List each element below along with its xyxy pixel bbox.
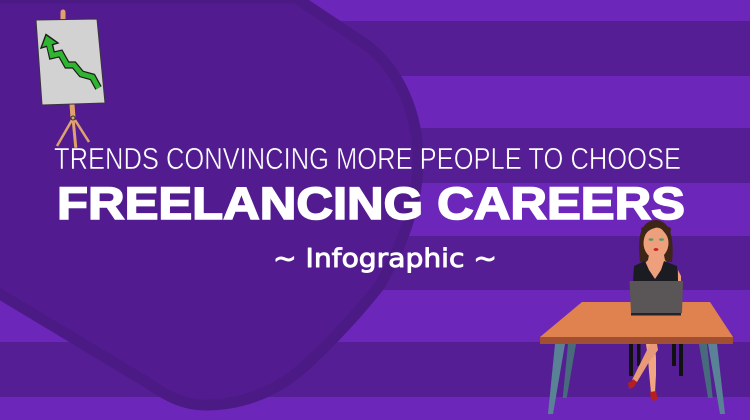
red shoes — [628, 379, 658, 401]
chart board — [36, 19, 105, 105]
subtitle: ~ Infographic ~ — [273, 244, 497, 274]
desk front edge — [540, 337, 733, 344]
crossed legs — [632, 344, 658, 393]
background blob panel — [0, 0, 418, 405]
hair — [639, 220, 673, 262]
icon: easel with growth chart — [36, 12, 105, 150]
easel stand — [57, 12, 89, 150]
arm — [678, 270, 681, 282]
face — [644, 228, 668, 258]
growth arrow — [41, 34, 98, 88]
desk back legs — [563, 344, 713, 398]
illustration: woman at desk — [540, 220, 733, 414]
black dress — [633, 261, 678, 282]
desk top — [540, 302, 733, 337]
laptop — [630, 281, 683, 316]
desk front legs — [548, 344, 725, 414]
neck and chest — [642, 250, 670, 279]
title line two: FREELANCING CAREERS — [57, 178, 685, 229]
eyes and mouth — [649, 238, 664, 251]
chair legs — [629, 344, 683, 376]
fringe — [641, 222, 671, 241]
